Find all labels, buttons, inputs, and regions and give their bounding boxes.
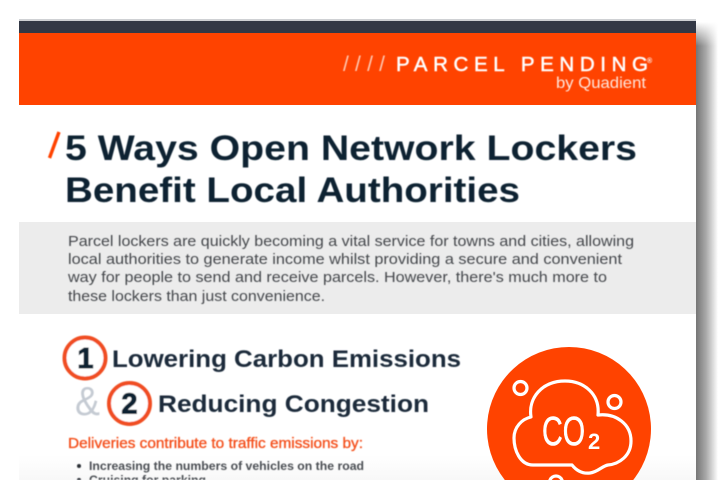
heading: reducing congestion: Reducing Congestion <box>158 391 429 418</box>
title line one: 5 Ways Open Network Lockers <box>65 128 637 168</box>
intro text <box>67 233 634 305</box>
section heading <box>64 338 461 424</box>
deliveries list <box>68 436 364 480</box>
bubble bottom <box>550 476 562 480</box>
title accent slash <box>50 132 59 158</box>
cloud outline <box>514 381 631 473</box>
number badge 1: 1 <box>77 343 94 375</box>
header band <box>19 21 696 105</box>
heading: lowering carbon emissions: Lowering Carbon Emissions <box>112 346 461 373</box>
bubble top right <box>608 396 621 408</box>
title <box>50 128 637 210</box>
page drop shadow <box>696 22 720 480</box>
CO2 label: CO <box>542 408 585 454</box>
logo subline: by Quadient <box>556 75 647 92</box>
number badge 2: 2 <box>121 388 138 420</box>
logo wordmark: PARCEL PENDING <box>396 53 648 76</box>
intro text: Parcel lockers are quickly becoming a vital service for towns and cities, allowing <box>68 233 634 250</box>
number badge 1 <box>64 338 106 378</box>
icon: CO2 cloud <box>487 347 651 480</box>
intro panel <box>19 222 696 314</box>
intro text: local authorities to generate income whilst providing a secure and convenient <box>68 251 623 268</box>
list heading: Deliveries contribute to traffic emissions by: <box>68 436 363 452</box>
intro text: these lockers than just convenience. <box>68 288 325 305</box>
intro text: way for people to send and receive parcels. However, there's much more to <box>67 269 607 286</box>
registered mark: ® <box>647 57 653 65</box>
number badge 2 <box>109 383 150 424</box>
list item one: Increasing the numbers of vehicles on the road <box>89 461 364 473</box>
ampersand: & <box>75 378 100 424</box>
bubble top left <box>514 382 527 394</box>
logo: Parcel Pending by Quadient <box>343 53 653 92</box>
CO2 subscript: 2 <box>588 429 600 454</box>
logo slashes: //// <box>343 53 385 76</box>
title line two: Benefit Local Authorities <box>65 170 520 210</box>
